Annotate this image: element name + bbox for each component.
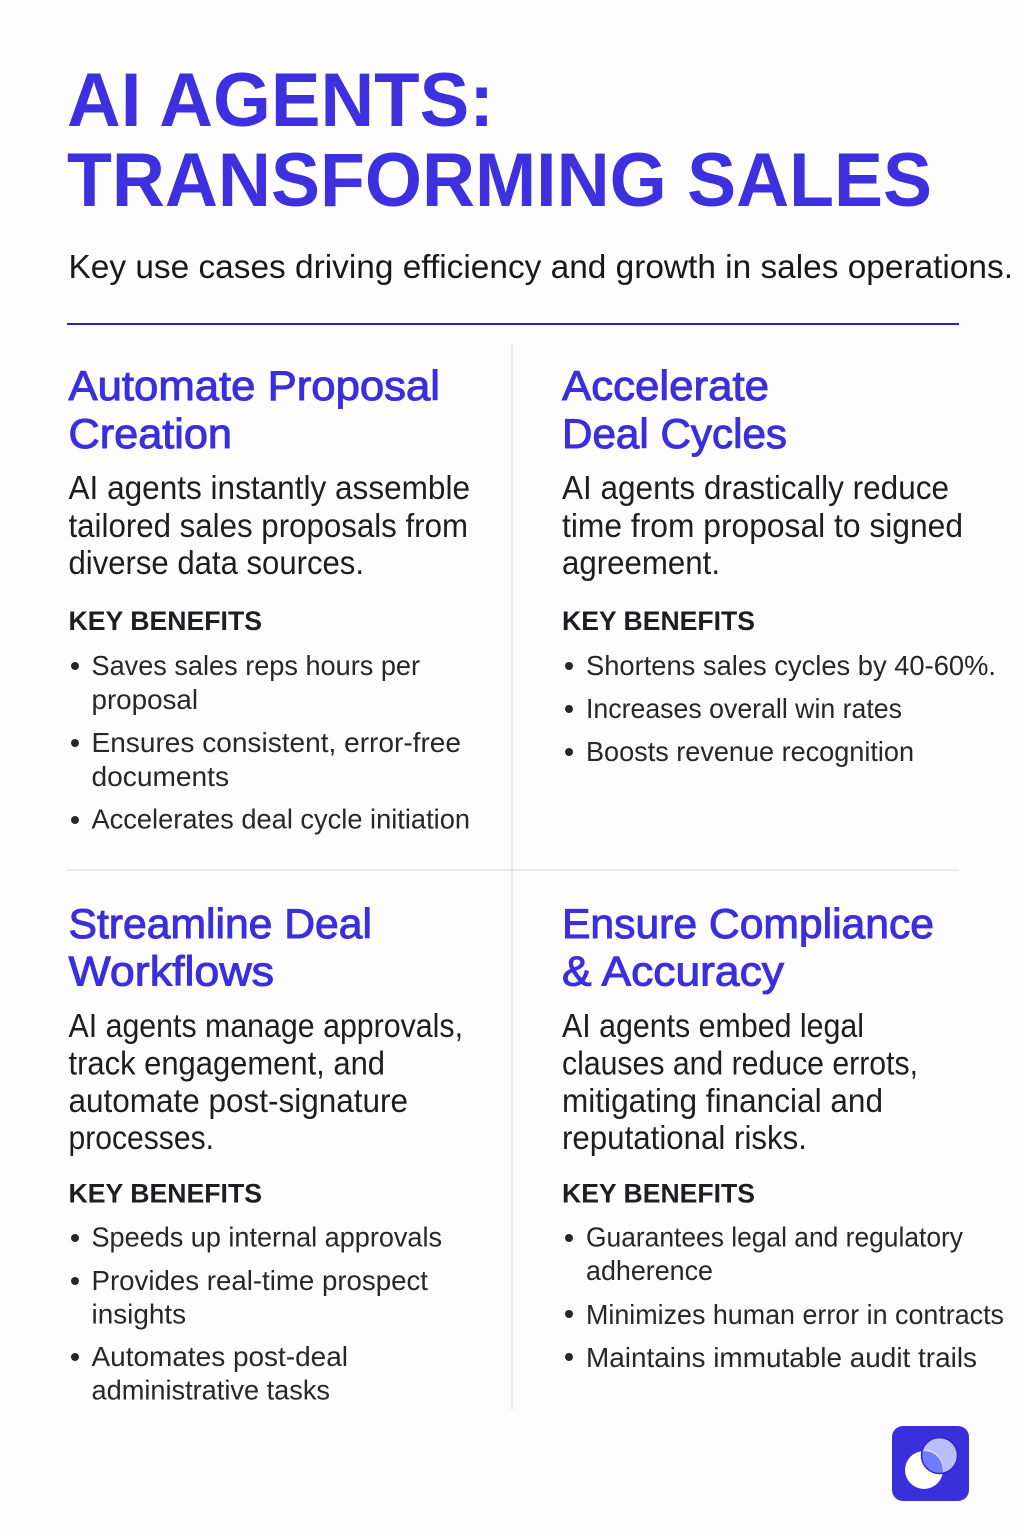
benefits list: Automates post-deal: [92, 1341, 348, 1372]
heading: ensure compliance and accuracy: & Accuracy: [562, 948, 784, 994]
benefits list: Provides real-time prospect: [92, 1265, 428, 1296]
description: processes.: [68, 1119, 214, 1156]
benefits list: Increases overall win rates: [586, 693, 902, 724]
benefits list: [71, 1222, 442, 1406]
benefits list: administrative tasks: [92, 1374, 330, 1406]
benefits list: [565, 650, 996, 767]
title: AI AGENTS:: [67, 58, 494, 143]
title: TRANSFORMING SALES: [67, 138, 932, 223]
panel: streamline deal workflows: [68, 900, 463, 1406]
heading: accelerate deal cycles: [562, 362, 787, 457]
key benefits label: KEY BENEFITS: [562, 606, 755, 636]
heading: automate proposal creation: Automate Proposal: [68, 362, 440, 409]
benefits list: Boosts revenue recognition: [586, 736, 914, 767]
description: agreement.: [562, 544, 720, 581]
benefits list: documents: [92, 761, 229, 792]
panel: automate proposal creation: [68, 362, 470, 834]
key benefits label: KEY BENEFITS: [68, 606, 262, 636]
benefits list: Speeds up internal approvals: [92, 1222, 442, 1252]
description: tailored sales proposals from: [68, 507, 468, 544]
heading: accelerate deal cycles: Accelerate: [562, 362, 769, 409]
benefits list: adherence: [586, 1255, 713, 1286]
description: AI agents drastically reduce: [562, 469, 949, 506]
description: [68, 469, 470, 581]
description: AI agents instantly assemble: [68, 469, 470, 506]
description: automate post-signature: [68, 1082, 408, 1119]
benefits list: Guarantees legal and regulatory: [586, 1222, 963, 1252]
benefits list: proposal: [92, 684, 198, 715]
heading: ensure compliance and accuracy: [562, 900, 934, 994]
description: diverse data sources.: [68, 544, 364, 581]
benefits list: Shortens sales cycles by 40-60%.: [586, 650, 996, 681]
benefits list: [565, 1222, 1004, 1373]
benefits list: Ensures consistent, error-free: [92, 727, 461, 758]
benefits list: Minimizes human error in contracts: [586, 1299, 1004, 1330]
description: reputational risks.: [562, 1119, 807, 1156]
description: time from proposal to signed: [562, 507, 963, 544]
benefits list: insights: [92, 1298, 186, 1330]
panel: accelerate deal cycles: [562, 362, 996, 767]
description: [562, 1007, 918, 1156]
description: track engagement, and: [68, 1044, 385, 1082]
description: [68, 1007, 463, 1156]
subtitle: Key use cases driving efficiency and growth in sales operations.: [68, 248, 1013, 285]
benefits list: Saves sales reps hours per: [92, 650, 420, 681]
heading: streamline deal workflows: Streamline Deal: [68, 900, 372, 947]
heading: ensure compliance and accuracy: Ensure Compliance: [562, 900, 934, 947]
key benefits label: KEY BENEFITS: [68, 1178, 262, 1208]
benefits list: Accelerates deal cycle initiation: [92, 804, 470, 834]
benefits list: [71, 650, 470, 834]
heading: streamline deal workflows: [68, 900, 372, 994]
panel: ensure compliance and accuracy: [562, 900, 1004, 1373]
description: [562, 469, 963, 581]
description: clauses and reduce errots,: [562, 1044, 918, 1082]
description: AI agents embed legal: [562, 1007, 864, 1044]
heading: accelerate deal cycles: Deal Cycles: [562, 410, 787, 457]
title: [67, 58, 932, 223]
key benefits label: KEY BENEFITS: [562, 1178, 755, 1208]
heading: automate proposal creation: Creation: [68, 410, 232, 457]
description: mitigating financial and: [562, 1082, 883, 1119]
description: AI agents manage approvals,: [68, 1007, 463, 1044]
icon: overlapping circles logo: [892, 1426, 969, 1501]
heading: automate proposal creation: [68, 362, 440, 457]
heading: streamline deal workflows: Workflows: [68, 948, 274, 994]
benefits list: Maintains immutable audit trails: [586, 1342, 977, 1373]
